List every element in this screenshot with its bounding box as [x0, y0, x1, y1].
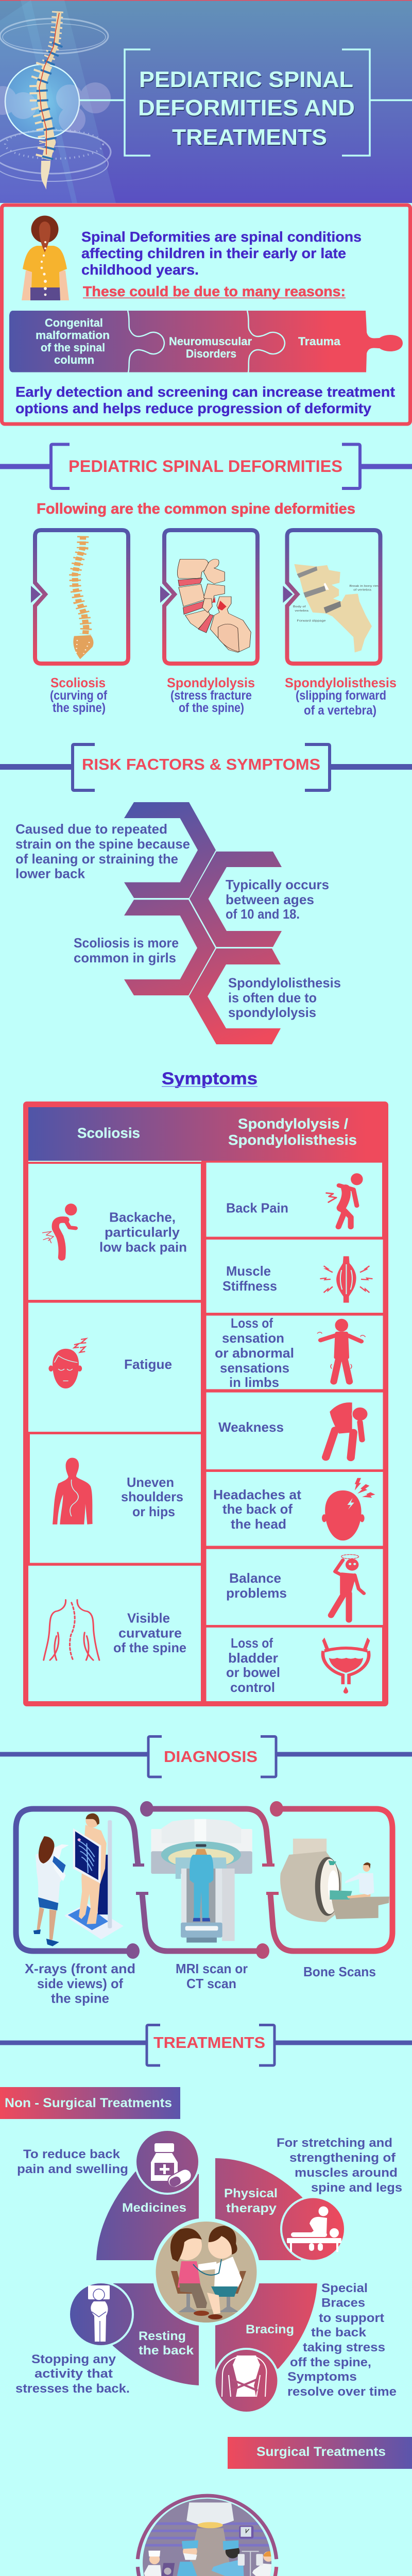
card: spondylolisthesis [283, 530, 397, 718]
cell: visible curvature: Visible [127, 1611, 170, 1626]
text: repeated strain: strain on the spine because [15, 836, 190, 852]
illustration: slipped vertebra [293, 564, 379, 652]
text: age range: of 10 and 18. [226, 906, 300, 922]
heading: diagnosis: DIAGNOSIS [164, 1748, 258, 1766]
arm: spondylolysis [189, 948, 281, 1044]
cell: loss of sensation: in limbs [229, 1375, 279, 1390]
icon: bent figure [326, 1402, 368, 1458]
cell: uneven shoulders: Uneven [127, 1475, 174, 1490]
heading: diagnosis [0, 1736, 412, 1777]
illustration: slipped vertebra: Forward slippage [297, 619, 326, 622]
puzzle labels: Neuromuscular [169, 335, 252, 348]
heading: treatments: TREATMENTS [153, 2033, 265, 2052]
text: bracing description [287, 2281, 397, 2399]
puzzle labels: Trauma [298, 335, 341, 348]
text: bracing description: Symptoms [287, 2370, 357, 2384]
cell: muscle stiffness [222, 1256, 372, 1303]
quadrant: resting the back: the back [139, 2344, 194, 2358]
subheading: common deformities: Following are the common spine deformities [37, 501, 355, 517]
illustration: vertebrae with fracture [177, 559, 251, 652]
text: definition: affecting children in their early or late [81, 245, 346, 261]
illustration: operating room [138, 2496, 277, 2576]
text: spondylolisthesis cause: spondylolysis [228, 1005, 316, 1020]
banner: non-surgical treatments: Non - Surgical Treatments [5, 2096, 172, 2110]
text: physical therapy description: strengthening of [289, 2151, 396, 2165]
cell: bladder control: control [230, 1680, 275, 1695]
diagram: non-surgical treatment wheel [68, 2129, 346, 2414]
text: spondylolisthesis cause: Spondylolisthesis [228, 975, 341, 990]
cell: loss of sensation [215, 1315, 365, 1390]
text: girls: Scoliosis is more [74, 935, 179, 951]
heading: pediatric spinal deformities [0, 444, 412, 488]
text: bracing description: to support [319, 2311, 384, 2325]
cell: uneven shoulders: shoulders [121, 1489, 183, 1504]
text: bracing description: taking stress [303, 2341, 385, 2354]
cell: backache [43, 1204, 187, 1258]
text: bracing description: Special [321, 2281, 368, 2295]
text: girls: common in girls [74, 950, 176, 965]
cell: bladder control: Loss of [231, 1635, 273, 1651]
cell: uneven shoulders: or hips [132, 1504, 175, 1519]
text: repeated strain [15, 821, 190, 881]
text: resting description: Stopping any [31, 2352, 116, 2366]
label [50, 675, 108, 715]
column: scoliosis cells [28, 1164, 201, 1701]
text: bracing description: the back [311, 2326, 367, 2340]
illustration: bone scanner [280, 1839, 389, 1922]
illustration: x-ray exam [33, 1814, 124, 1946]
puzzle labels: Disorders [186, 347, 236, 360]
text: early detection [15, 384, 395, 416]
text: physical therapy description: spine and legs [311, 2181, 402, 2195]
text: definition: Spinal Deformities are spinal conditions [81, 229, 362, 245]
icon: physical therapy massage [280, 2196, 346, 2262]
cell: visible curvature: of the spine [113, 1640, 186, 1655]
puzzle labels: of the spinal [41, 341, 105, 354]
table header: Spondylolysis / [238, 1116, 348, 1132]
card: scoliosis [31, 530, 128, 715]
arm: repeated strain [124, 802, 216, 898]
label: (curving of [50, 688, 108, 703]
quadrant: resting the back: Resting [139, 2329, 186, 2343]
illustration: slipped vertebra: Break in bony rim [350, 585, 379, 588]
cell: muscle stiffness: Muscle [226, 1263, 271, 1279]
icon: head with pain bolts [322, 1478, 375, 1540]
table header [28, 1107, 384, 1161]
cell: headaches: Headaches at [213, 1487, 301, 1502]
text: physical therapy description: For stretching and [277, 2136, 392, 2150]
cell: loss of sensation: Loss of [231, 1315, 273, 1331]
heading: symptoms: Symptoms [162, 1069, 258, 1088]
text: repeated strain: of leaning or straining the [15, 851, 178, 867]
text: bracing description: off the spine, [290, 2355, 371, 2369]
heading: treatments [0, 2025, 412, 2065]
icon: bladder [322, 1638, 370, 1693]
text: medicines description [17, 2147, 128, 2176]
arm: girls [124, 900, 215, 995]
title: PEDIATRIC SPINAL [139, 67, 353, 92]
cell: weakness [218, 1402, 368, 1458]
card: spondylolysis [160, 530, 258, 715]
puzzle labels [36, 316, 341, 366]
title [138, 67, 355, 150]
icon: medicine bottle and capsule [134, 2129, 200, 2195]
label [167, 675, 255, 715]
quadrant: physical therapy: Physical [224, 2187, 278, 2200]
text: spondylolisthesis cause [228, 975, 341, 1020]
text: resting description: stresses the back. [15, 2382, 130, 2396]
heading: risk factors and symptoms: RISK FACTORS & SYMPTOMS [82, 755, 320, 773]
text: repeated strain: lower back [15, 866, 85, 881]
cell: headaches [213, 1478, 375, 1540]
text: girls [74, 935, 179, 965]
illustration: orange spine [73, 536, 93, 659]
glowing orb circle [5, 64, 79, 139]
cell: fatigue [48, 1338, 172, 1388]
label: the spine) [53, 701, 106, 715]
illustration: spine [38, 11, 59, 190]
quadrant: physical therapy [215, 2158, 313, 2260]
text: definition: childhood years. [81, 262, 199, 278]
center ring: doctor and child [152, 2218, 261, 2326]
cell: headaches: the head [231, 1516, 286, 1532]
cell: loss of sensation: sensation [222, 1330, 284, 1346]
cell: backache: particularly [105, 1224, 180, 1240]
text: x-rays [25, 1961, 135, 2006]
quadrant: medicines [96, 2162, 199, 2260]
text: age range [226, 877, 329, 922]
text: bracing description: resolve over time [287, 2385, 397, 2399]
puzzle: reasons [9, 311, 403, 372]
column: spondylolysis cells [206, 1163, 383, 1701]
illustration: slipped vertebra: of vertebra [353, 588, 371, 591]
label: (slipping forward [296, 688, 386, 703]
text: early detection: options and helps reduce progression of deformity [15, 400, 371, 416]
icon: back pain figure [327, 1173, 363, 1227]
cell: backache: low back pain [99, 1240, 187, 1255]
cell: bladder control [226, 1635, 370, 1695]
text: bone scans: Bone Scans [303, 1964, 376, 1979]
arm: age range [190, 852, 282, 947]
quadrant: bracing: Bracing [246, 2323, 294, 2336]
cell: visible curvature [44, 1600, 186, 1660]
chart: risk factor hexagon arms [124, 802, 282, 1044]
cell: loss of sensation: sensations [220, 1360, 289, 1376]
text: repeated strain: Caused due to repeated [15, 821, 167, 837]
puzzle labels: column [54, 353, 94, 366]
puzzle labels: Congenital [45, 316, 103, 329]
frames: diagnosis connectors [16, 1801, 392, 1959]
header banner [0, 0, 412, 203]
icon: torso [53, 1458, 93, 1524]
banner: surgical treatments: Surgical Treatments [256, 2445, 386, 2459]
title frame [80, 49, 412, 156]
heading: pediatric spinal deformities: PEDIATRIC SPINAL DEFORMITIES [68, 457, 342, 476]
icon: resting figure [68, 2281, 134, 2347]
text: mri [176, 1961, 248, 1991]
text: mri: MRI scan or [176, 1961, 248, 1976]
text: resting description [15, 2352, 130, 2396]
icon: girl with curved spine [22, 215, 69, 300]
text: age range: Typically occurs [226, 877, 329, 892]
banner: non-surgical treatments [0, 2087, 180, 2119]
table: symptoms [23, 1101, 388, 1706]
label: Scoliosis [50, 675, 106, 690]
text: x-rays: the spine [51, 1991, 109, 2006]
cell: uneven shoulders [53, 1458, 183, 1524]
text: age range: between ages [226, 892, 314, 907]
cell: back pain: Back Pain [226, 1200, 288, 1216]
cell: fatigue: Fatigue [124, 1357, 172, 1372]
cell: back pain [226, 1173, 363, 1227]
text: mri: CT scan [186, 1976, 236, 1991]
cell: balance problems [226, 1554, 364, 1620]
swirl rings [0, 19, 111, 181]
illustration: slipped vertebra: Body of [293, 605, 306, 608]
text: physical therapy description: muscles around [295, 2166, 398, 2180]
quadrant: physical therapy: therapy [226, 2201, 277, 2215]
icon: tired head [48, 1338, 86, 1388]
cell: balance problems: problems [226, 1585, 287, 1601]
text: reasons heading: These could be due to many reasons: [83, 283, 346, 299]
illustration: slipped vertebra: vertebra [295, 609, 309, 612]
text: definition [81, 229, 362, 278]
label: Spondylolysis [167, 675, 255, 690]
text: x-rays: side views) of [37, 1976, 123, 1991]
label: of a vertebra) [304, 703, 376, 718]
cell: muscle stiffness: Stiffness [222, 1278, 277, 1294]
banner: surgical treatments [228, 2437, 412, 2469]
cell: bladder control: bladder [228, 1650, 278, 1666]
label [285, 675, 397, 718]
cell: bladder control: or bowel [226, 1665, 280, 1680]
label: (stress fracture [170, 688, 252, 703]
title: DEFORMITIES AND [138, 95, 355, 121]
text: medicines description: To reduce back [23, 2147, 121, 2161]
cell: headaches: the back of [222, 1501, 293, 1517]
quadrant: medicines: Medicines [122, 2201, 186, 2215]
icon: dizzy figure [331, 1554, 364, 1620]
text: early detection: Early detection and screening can increase treatment [15, 384, 395, 400]
bokeh lights [0, 82, 111, 133]
heading: risk factors and symptoms [0, 744, 412, 790]
illustration: mri scan [151, 1819, 252, 1943]
text: x-rays: X-rays (front and [25, 1961, 135, 1976]
text: physical therapy description [277, 2136, 402, 2195]
icon: brace on torso [213, 2348, 279, 2414]
icon: backache figure [43, 1204, 77, 1258]
cell: backache: Backache, [109, 1209, 176, 1225]
label: of the spine) [179, 701, 244, 715]
title: TREATMENTS [172, 125, 327, 150]
cell: loss of sensation: or abnormal [215, 1345, 294, 1361]
table header: Scoliosis [77, 1125, 140, 1141]
text: resting description: activity that [35, 2367, 113, 2381]
icon: muscle [320, 1256, 372, 1303]
panel: intro [2, 205, 410, 424]
cell: visible curvature: curvature [118, 1625, 182, 1641]
cell: weakness: Weakness [218, 1419, 284, 1435]
quadrant: bracing [215, 2283, 317, 2381]
cell: balance problems: Balance [229, 1570, 281, 1586]
text: medicines description: pain and swelling [17, 2162, 128, 2176]
text: bracing description: Braces [321, 2296, 365, 2310]
puzzle labels: malformation [36, 329, 110, 342]
label: Spondylolisthesis [285, 675, 397, 690]
text: spondylolisthesis cause: is often due to [228, 990, 317, 1006]
icon: back outline with curved spine [44, 1600, 99, 1660]
table header: Spondylolisthesis [228, 1132, 357, 1148]
quadrant: resting the back [101, 2283, 199, 2385]
icon: numb limbs figure [317, 1319, 365, 1382]
